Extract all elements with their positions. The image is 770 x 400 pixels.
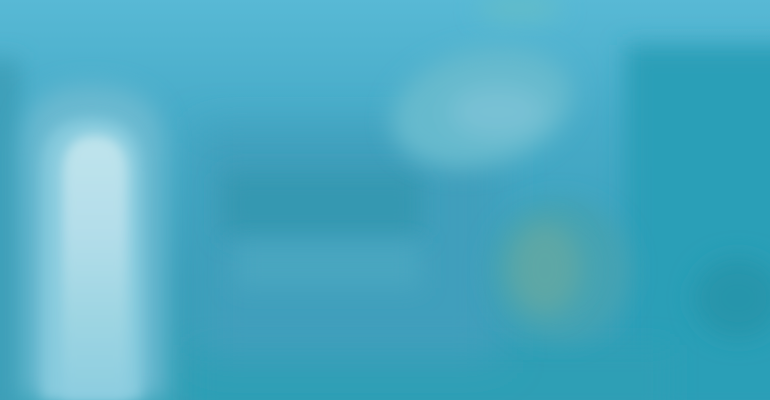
light central band xyxy=(235,243,420,288)
lower teal band xyxy=(190,345,670,400)
top green tint xyxy=(478,0,562,22)
dark central block xyxy=(222,172,422,238)
green circular spot xyxy=(490,200,630,340)
left edge shade xyxy=(0,60,20,400)
dark teal spot xyxy=(694,258,770,338)
light cloud ellipse xyxy=(379,29,585,187)
right teal panel xyxy=(625,45,770,400)
glowing white column xyxy=(22,85,165,400)
central mid-blue area xyxy=(200,130,500,360)
